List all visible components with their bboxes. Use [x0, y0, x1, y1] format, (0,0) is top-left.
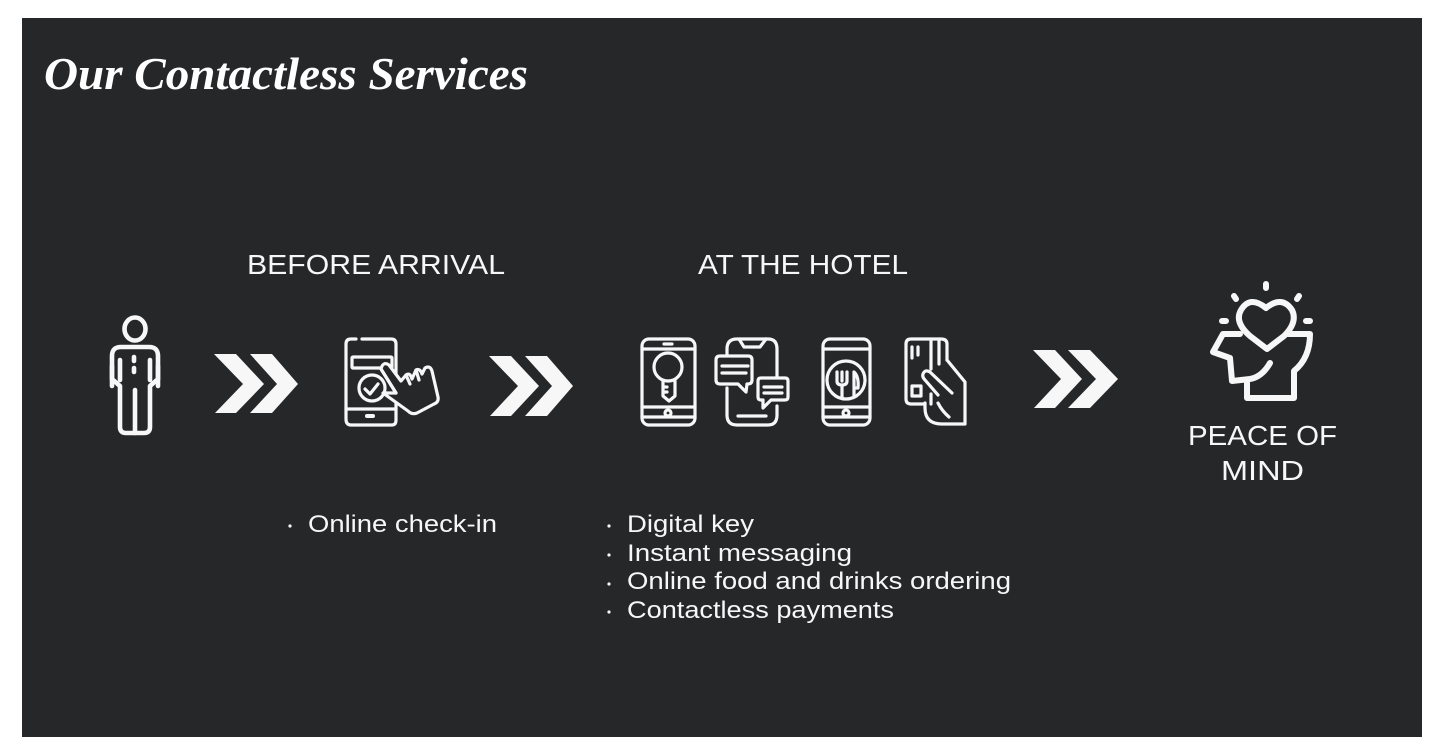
list: at the hotel services: Instant messaging	[627, 540, 852, 567]
arrow: chevrons 2	[489, 356, 573, 416]
label: peace of mind: MIND	[1221, 455, 1304, 486]
icon: phone with food ordering	[823, 339, 870, 425]
heading: before arrival: BEFORE ARRIVAL	[247, 249, 505, 280]
label: peace of mind: PEACE OF	[1188, 420, 1337, 451]
list: at the hotel services: Digital key	[627, 511, 754, 538]
icon: phone with instant messages	[716, 339, 788, 425]
label: peace of mind	[1188, 420, 1337, 486]
icon: peace of mind head with heart	[1213, 284, 1310, 398]
title: Our Contactless Services	[44, 48, 528, 99]
icon: phone with check-in tap	[346, 339, 438, 425]
icon: hand holding card	[906, 339, 965, 424]
heading: at the hotel: AT THE HOTEL	[698, 249, 908, 280]
list: at the hotel services: Online food and drinks ordering	[627, 568, 1011, 595]
arrow: chevrons 3	[1033, 350, 1118, 408]
list: at the hotel services: Contactless payments	[627, 597, 894, 624]
icon: phone with digital key	[642, 339, 695, 425]
list: before arrival services: Online check-in	[308, 511, 497, 538]
arrow: chevrons 1	[214, 354, 298, 413]
icon: person	[112, 318, 158, 433]
list: at the hotel services	[607, 511, 1011, 624]
